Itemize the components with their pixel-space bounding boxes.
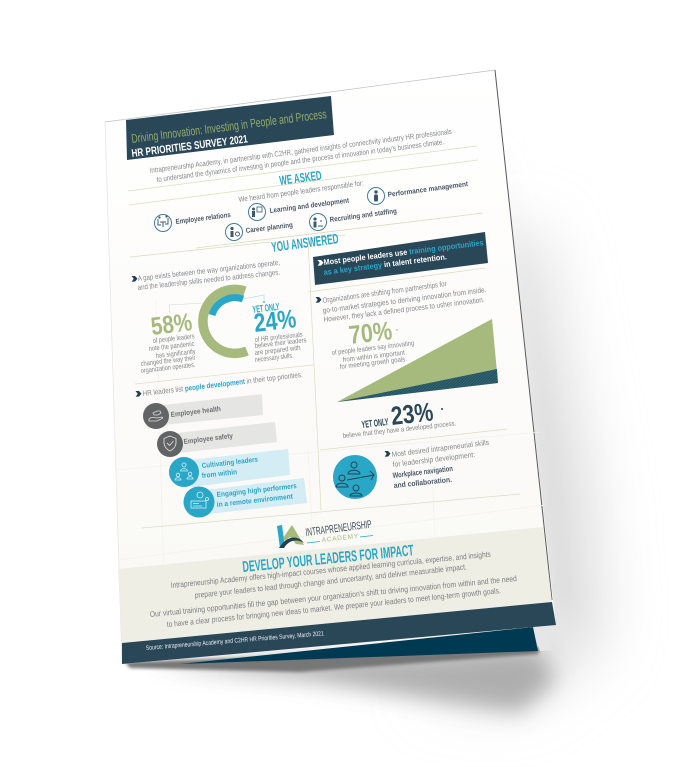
stat: 23 percent — [342, 396, 457, 440]
logo: intrapreneurship academy — [277, 519, 373, 548]
heading: develop your leaders: DEVELOP YOUR LEADERS FOR IMPACT — [242, 542, 415, 576]
stat: 23 percent: believe that they have a developed process. — [342, 421, 457, 440]
label: learning and development: Learning and development — [269, 196, 350, 215]
responsibilities list — [154, 179, 469, 240]
priority: employee health: Employee health — [170, 404, 221, 419]
stat: 24 percent: necessary skills. — [254, 353, 294, 364]
stat: 58 percent — [140, 308, 196, 375]
bullet text: HR leaders list people development in their top priorities. — [142, 370, 303, 398]
label: career planning: Career planning — [245, 220, 293, 235]
stat: 24 percent: are prepared with — [254, 345, 301, 357]
stat: 70 percent: from within is important — [342, 350, 405, 364]
panel: top priorities — [136, 370, 307, 518]
back page — [180, 624, 553, 664]
title: Driving Innovation: Investing in People and Process — [131, 107, 327, 146]
heading: you answered: YOU ANSWERED — [270, 230, 339, 255]
stat: 24 percent: believe their leaders — [254, 337, 307, 350]
stat: 58 percent: changed the way their — [140, 355, 196, 368]
stat: 24 percent: YET ONLY — [252, 302, 280, 316]
bullet text: Most desired intrapreneurial skills — [391, 438, 490, 459]
bullet text: Workplace navigation — [392, 464, 454, 480]
stat: 70 percent: of people leaders say innovating — [331, 340, 415, 357]
stat: 58 percent: organization operates. — [140, 362, 196, 375]
stat: 58 percent: of people leaders — [152, 333, 195, 345]
footer band — [122, 602, 556, 664]
title band — [126, 96, 334, 160]
bullet text — [132, 258, 280, 292]
bullet text: and collaboration. — [393, 475, 452, 490]
icon: employee relations — [154, 214, 172, 232]
stat: 24 percent: of HR professionals — [254, 332, 303, 344]
label: recruiting and staffing: Recruiting and staffing — [329, 206, 397, 224]
stat: 23 percent: YET ONLY — [361, 417, 389, 431]
bullet text — [384, 438, 490, 490]
panel: innovation process — [316, 279, 498, 440]
beige footer band — [118, 527, 552, 643]
priority: employee health — [143, 394, 263, 429]
logo: intrapreneurship academy: INTRAPRENEURSHIP — [305, 519, 372, 539]
stat: 58 percent: note the pandemic — [148, 341, 195, 353]
icon: learning and development — [248, 204, 266, 220]
intro text: to understand the dynamics of investing in people and the process of innovation in today's business climate. — [156, 137, 444, 184]
stat: 23 percent: 23% — [389, 396, 435, 431]
wedge chart — [337, 319, 498, 402]
stat: 70 percent — [331, 315, 415, 371]
bullet text: for leadership development: — [392, 450, 476, 469]
panel: leadership gap — [132, 258, 307, 375]
stat: 24 percent — [252, 302, 307, 364]
callout: training opportunities: Most people leaders use training opportunities — [323, 238, 484, 267]
bullet text: Organizations are shifting from partnerships for — [322, 279, 447, 305]
icon: career planning — [226, 224, 242, 240]
bullet text: A gap exists between the way organizations operate, — [137, 258, 280, 283]
footer band: Source: Intrapreneurship Academy and C2HR HR Priorities Survey, March 2021 — [146, 630, 324, 652]
priority: cultivating leaders: from within — [201, 467, 237, 480]
icon: collaboration network — [333, 455, 377, 499]
bullet text: go-to-market strategies to deriving innovation from inside. — [322, 285, 487, 315]
closing text: Our virtual training opportunities fill the gap between your organization's shift to driving innovation from within and the need — [149, 574, 517, 619]
panel: brochure page — [105, 70, 556, 664]
priority: engaging high performers: in a remote environment — [216, 491, 294, 509]
stat: 58 percent: has significantly — [155, 348, 196, 360]
bullet text — [316, 279, 487, 324]
stat: 70 percent: for meeting growth goals. — [339, 356, 407, 371]
closing text — [149, 550, 517, 629]
icon: performance management — [368, 188, 384, 204]
stat: 24 percent: 24% — [252, 303, 298, 338]
closing text: prepare your leaders to lead through change and uncertainty, and deliver measurable impact. — [194, 562, 467, 600]
heading: we asked: WE ASKED — [278, 168, 322, 188]
priority: engaging high performers: Engaging high performers — [216, 481, 297, 499]
priority: cultivating leaders: Cultivating leaders — [201, 455, 258, 470]
subtitle: HR PRIORITIES SURVEY 2021 — [131, 133, 248, 160]
bullet text: and the leadership skills needed to address changes. — [137, 268, 280, 292]
we heard text: We heard from people leaders responsible for: — [238, 178, 364, 204]
priority: employee safety — [157, 422, 277, 457]
callout: training opportunities — [313, 232, 488, 285]
stat: 70 percent: 70% — [347, 315, 394, 350]
bullet text: However, they lack a defined process to usher innovation. — [323, 295, 485, 324]
donut chart — [169, 289, 265, 353]
label: performance management: Performance management — [387, 179, 469, 199]
closing text: Intrapreneurship Academy offers high-impact courses whose applied learning curricula, expertise, and insights — [170, 550, 491, 590]
icon: recruiting and staffing — [310, 214, 326, 230]
panel: desired skills — [333, 438, 490, 499]
stat: 58 percent: 58% — [149, 308, 194, 341]
priority: cultivating leaders — [169, 449, 290, 487]
drop shadow — [125, 130, 600, 712]
closing text: to have a clear process for bringing new ideas to market. We prepare your leaders to meet long-term growth goals. — [166, 586, 501, 629]
label: employee relations: Employee relations — [175, 210, 231, 226]
priority: employee safety: Employee safety — [183, 431, 233, 446]
callout: training opportunities: as a key strategy in talent retention. — [323, 252, 447, 277]
priority: engaging high performers — [184, 478, 307, 518]
intro text: Intrapreneurship Academy, in partnership with C2HR, gathered insights of connectivity industry HR professionals — [149, 127, 452, 175]
logo: intrapreneurship academy: ACADEMY — [321, 533, 359, 544]
